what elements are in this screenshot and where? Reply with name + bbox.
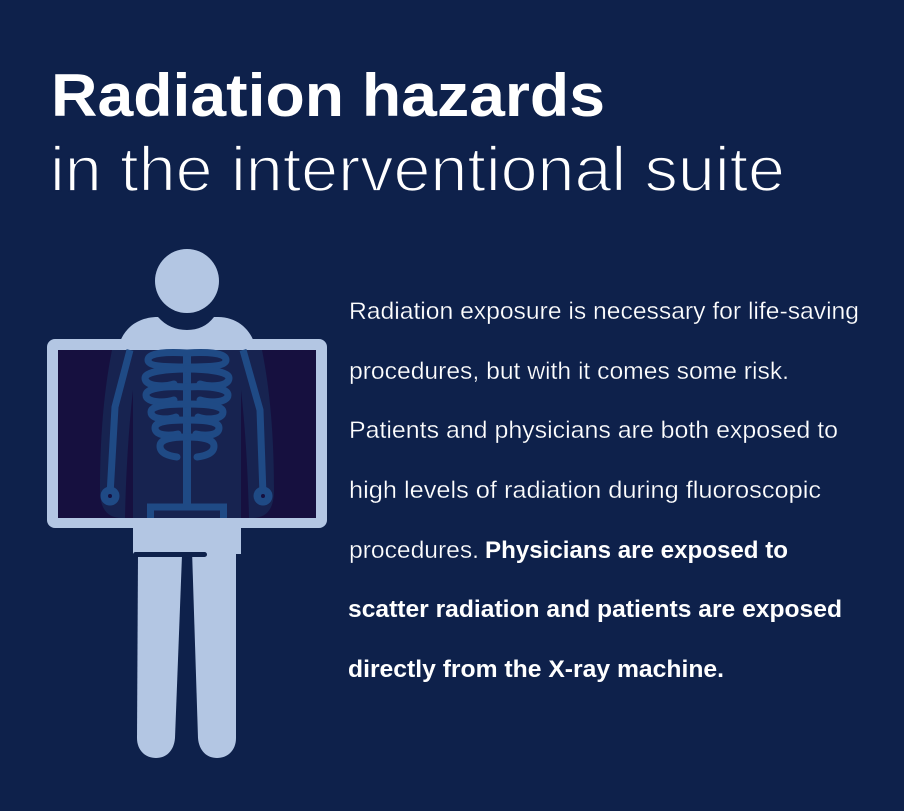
body text: regular: procedures, but with it comes some risk. [349, 358, 789, 385]
icon: shoulders [120, 317, 254, 342]
body text: bold: Physicians are exposed to [485, 537, 788, 564]
body text: regular [349, 298, 859, 564]
icon: waist gap [133, 552, 207, 557]
x-ray: right hand joint [256, 488, 270, 504]
title [50, 62, 785, 205]
x-ray: pelvis [150, 507, 224, 518]
body text: regular: procedures. [349, 537, 479, 564]
icon: head [155, 249, 219, 313]
x-ray: skeleton [110, 350, 263, 518]
icon: hips [133, 525, 241, 554]
x-ray: left hand joint [102, 488, 118, 504]
x-ray: ribs [145, 353, 229, 457]
x-ray: spine [183, 350, 191, 505]
title: bold line: Radiation hazards [51, 62, 605, 129]
x-ray: right arm [243, 350, 263, 495]
body text: bold: scatter radiation and patients are exposed [348, 596, 842, 623]
icon: right leg [192, 550, 236, 758]
body text: bold: directly from the X-ray machine. [348, 656, 724, 683]
body text: regular: Radiation exposure is necessary for life-saving [349, 298, 859, 325]
body text: bold [348, 537, 842, 683]
x-ray: body silhouette [100, 350, 274, 518]
icon: x-ray monitor [47, 339, 327, 528]
x-ray: left arm [110, 350, 130, 495]
body text [348, 298, 859, 683]
body text: regular: Patients and physicians are both exposed to [349, 417, 838, 444]
body text: regular: high levels of radiation during fluoroscopic [349, 477, 821, 504]
title: light line: in the interventional suite [50, 135, 785, 205]
illustration: person behind x-ray screen [47, 249, 327, 758]
icon: left leg [137, 555, 182, 758]
